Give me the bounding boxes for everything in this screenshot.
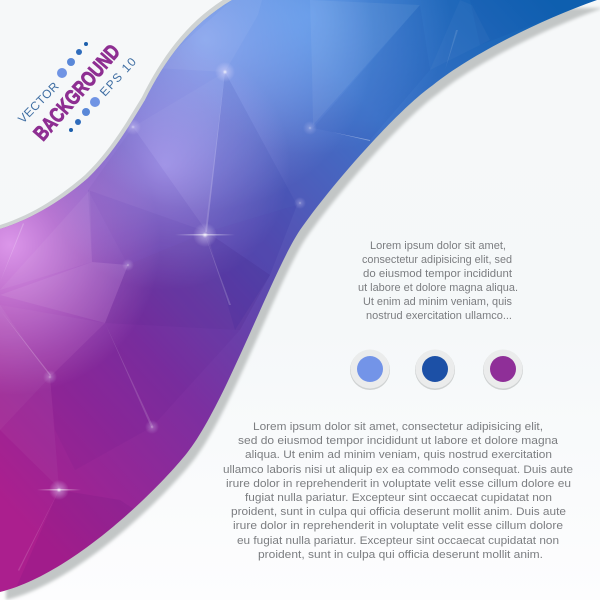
text block: top paragraph: ut labore et dolore magna aliqua.	[358, 282, 518, 294]
label: eps 10: EPS 10	[97, 55, 139, 99]
text block: bottom paragraph: ullamco laboris nisi ut aliquip ex ea commodo consequat. Duis aute	[223, 464, 573, 476]
sparkles	[37, 62, 317, 500]
text block: bottom paragraph: Lorem ipsum dolor sit amet, consectetur adipisicing elit,	[253, 421, 543, 433]
text block: bottom paragraph: irure dolor in reprehenderit in voluptate velit esse cillum dolore eu	[226, 478, 571, 490]
icon: upper dots	[57, 42, 88, 78]
text block: bottom paragraph: proident, sunt in culpa qui officia deserunt mollit anim. Duis aute	[231, 506, 566, 518]
text block: top paragraph: consectetur adipisicing elit, sed	[362, 254, 512, 266]
logo: vector background eps 10	[15, 40, 139, 145]
text block: bottom paragraph: fugiat nulla pariatur. Excepteur sint occaecat cupidatat non	[245, 492, 552, 504]
colour buttons	[350, 350, 523, 390]
text block: top paragraph: Ut enim ad minim veniam, quis	[363, 296, 512, 308]
button: dark blue	[415, 350, 455, 390]
text block: bottom paragraph	[223, 421, 573, 561]
label: background: BACKGROUND	[29, 40, 125, 145]
text block: bottom paragraph: aliqua. Ut enim ad minim veniam, quis nostrud exercitation	[245, 449, 552, 461]
label: vector: VECTOR	[15, 79, 62, 126]
text block: bottom paragraph: proident, sunt in culpa qui officia deserunt mollit anim.	[258, 549, 543, 561]
text block: bottom paragraph: eu fugiat nulla pariatur. Excepteur sint occaecat cupidatat non	[237, 535, 559, 547]
light rays	[0, 30, 458, 571]
text block: top paragraph: do eiusmod tempor incididunt	[363, 268, 512, 280]
text block: top paragraph: Lorem ipsum dolor sit amet,	[370, 240, 506, 252]
button: light blue	[350, 350, 390, 390]
text block: bottom paragraph: irure dolor in reprehenderit in voluptate velit esse cillum dolore	[233, 520, 563, 532]
button: purple	[483, 350, 523, 390]
text block: top paragraph	[358, 240, 518, 322]
icon: lower dots	[69, 97, 100, 132]
text block: bottom paragraph: sed do eiusmod tempor incididunt ut labore et dolore magna	[238, 435, 559, 447]
text block: top paragraph: nostrud exercitation ullamco...	[366, 310, 512, 322]
